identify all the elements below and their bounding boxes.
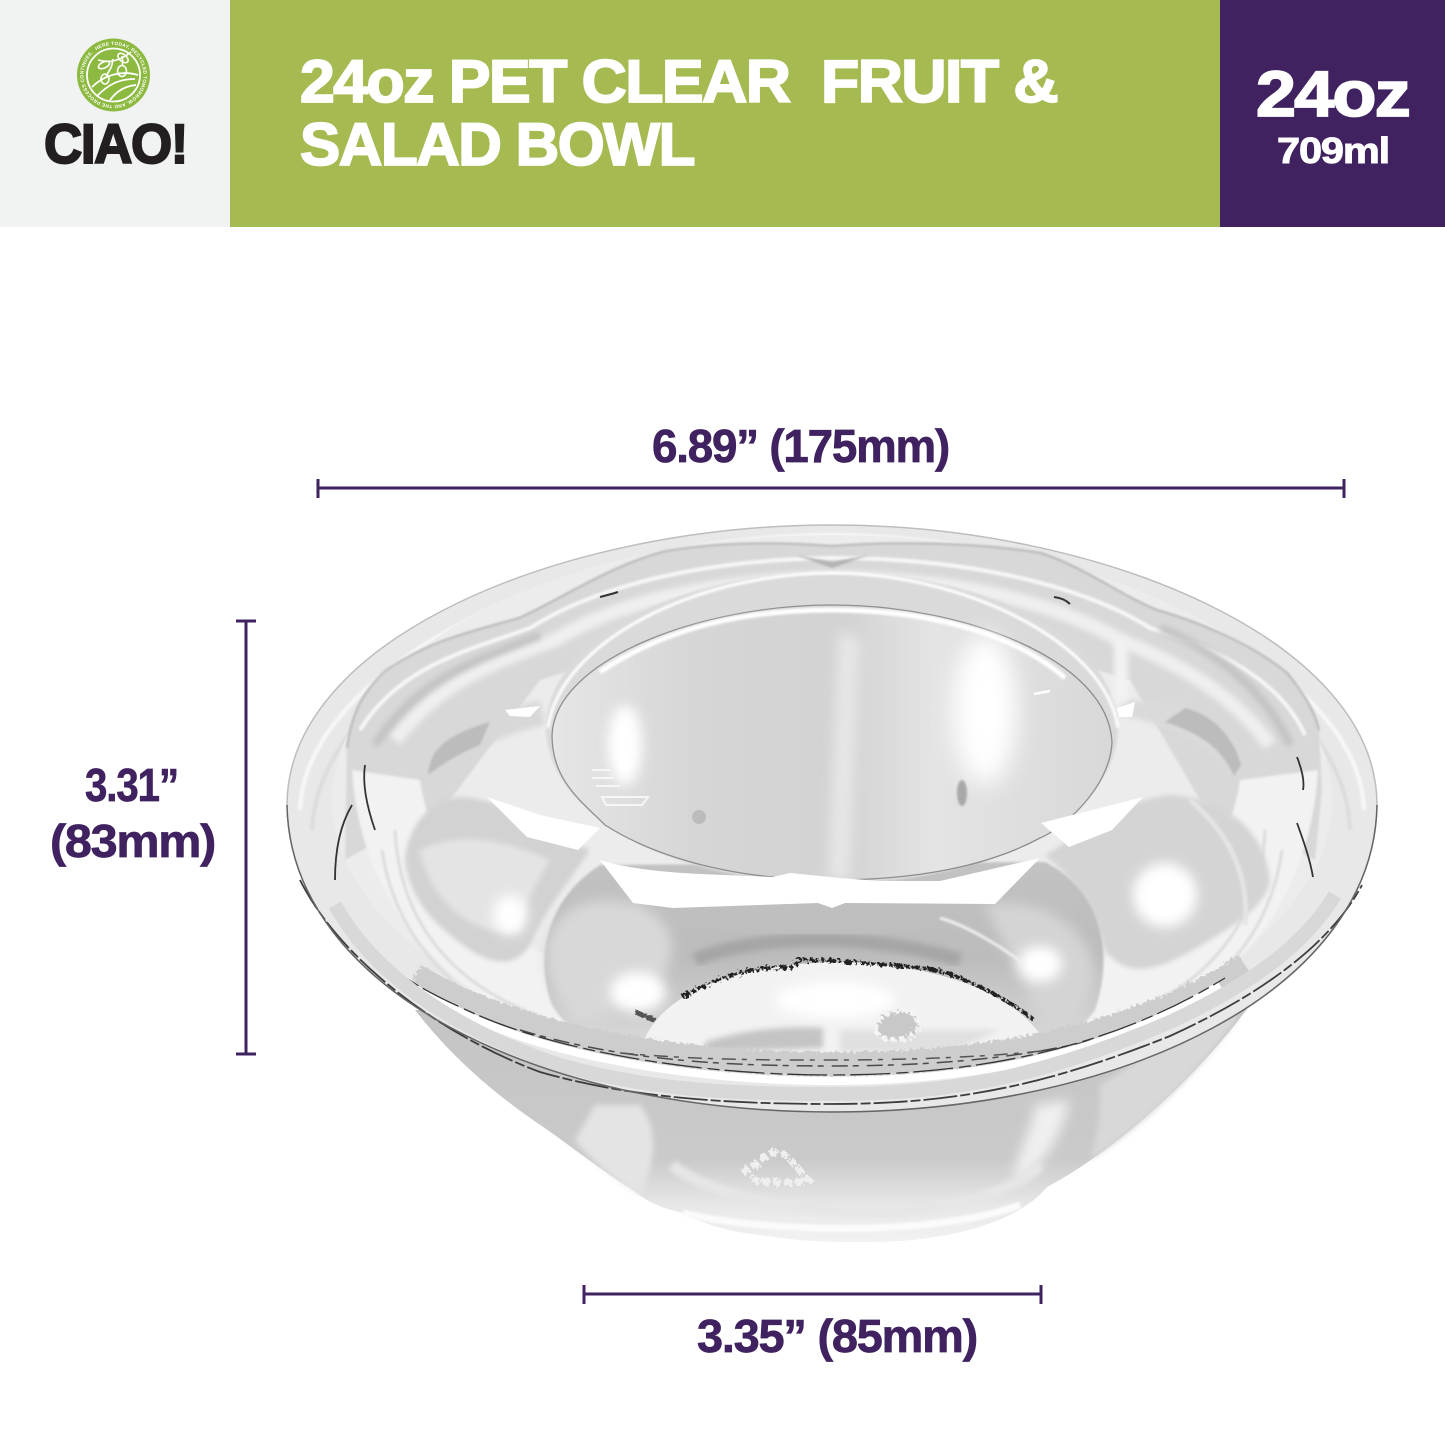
title: SALAD BOWL <box>300 111 694 178</box>
width label: 6.89” (175mm) <box>652 420 949 472</box>
lid spots <box>957 780 967 806</box>
icon: recycled olive badge: HERE TODAY, RECYCLED TOMORROW, AND THE PROCESS CONTINUES. <box>80 42 147 108</box>
lobe dark stripes <box>695 940 960 960</box>
base label: 3.35” (85mm) <box>697 1310 977 1362</box>
dimension: base width <box>584 1285 1041 1362</box>
header: capacity panel <box>1220 0 1445 227</box>
left dark scallop lines <box>335 765 375 880</box>
title <box>300 48 1057 178</box>
lid embossed mark <box>592 770 648 805</box>
flange streaks <box>300 535 1364 810</box>
dimension: height: (83mm) <box>50 815 215 867</box>
width line <box>318 479 1344 498</box>
header: title panel <box>230 0 1220 227</box>
recycling mark <box>742 1153 808 1183</box>
lid shoulder band <box>345 543 1322 860</box>
disc highlights <box>600 610 1065 678</box>
upper side pockets <box>424 700 545 780</box>
title: 24oz PET CLEAR FRUIT & <box>300 48 1057 115</box>
dome lid centre disc <box>552 605 1112 880</box>
front rim flange band <box>335 895 1335 1094</box>
dimension: top width <box>318 420 1344 498</box>
capacity in millilitres: 709ml <box>1277 130 1389 171</box>
body highlights <box>575 1105 653 1195</box>
logo wordmark: CIAO! <box>44 112 187 175</box>
dimension: height <box>50 621 256 1054</box>
base line <box>584 1285 1041 1304</box>
left lobe <box>405 797 590 962</box>
height line <box>236 621 256 1054</box>
bowl floor <box>640 962 1050 1073</box>
white glare shapes <box>600 858 1040 908</box>
side streak areas <box>352 770 1318 1040</box>
bowl interior <box>332 535 1332 1065</box>
lower lobe <box>544 862 1103 1052</box>
height label: 3.31” <box>85 759 178 811</box>
right lobe <box>1045 795 1270 969</box>
outer rim flange <box>287 525 1377 1112</box>
lid band highlights <box>360 558 1305 735</box>
bowl body <box>415 1005 1250 1242</box>
front rim mottled band <box>415 965 1245 1064</box>
front rim white stripe <box>373 955 1220 1081</box>
dome lid ring <box>546 572 1118 884</box>
right dark scallop lines <box>1297 757 1313 877</box>
capacity in ounces: 24oz <box>1256 58 1409 130</box>
product image: clear salad bowl with dome lid <box>287 525 1377 1242</box>
dark notch marks <box>600 592 1070 604</box>
header: logo panel <box>0 0 230 227</box>
dark floor arc <box>682 960 1034 1020</box>
